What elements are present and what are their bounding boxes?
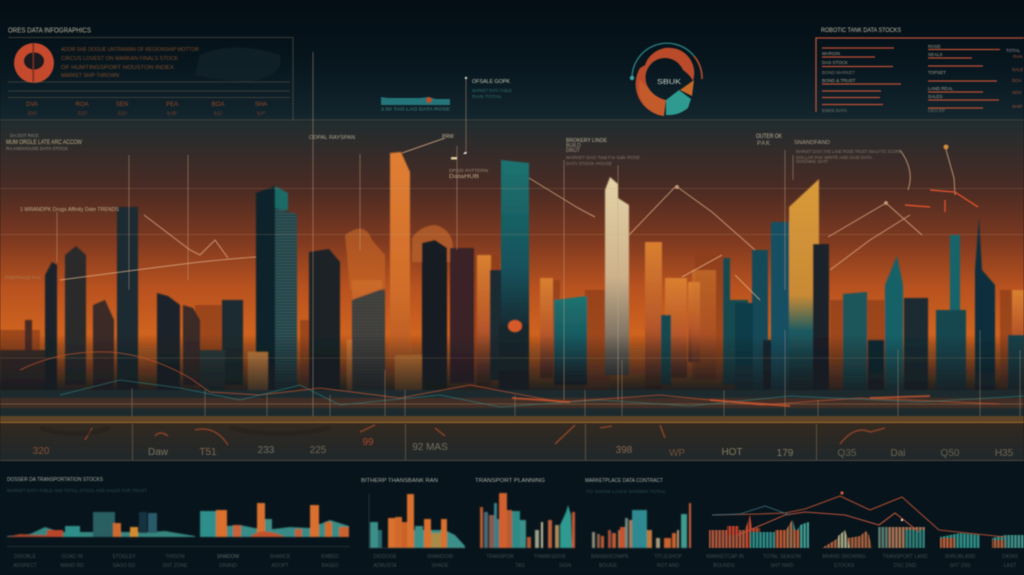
lower city shadow <box>0 335 1024 397</box>
grid lines <box>0 120 1024 234</box>
donut center label: SBUK <box>657 77 681 86</box>
strip smudges <box>40 425 885 445</box>
chart labels: SHT ZNS <box>949 563 971 569</box>
trend lines <box>712 491 1005 537</box>
chart labels: EMBED <box>321 554 339 560</box>
row labels: ROSE <box>928 44 941 49</box>
annotation: upper right note <box>756 134 901 164</box>
axis verticals <box>57 52 793 420</box>
orange low block <box>248 352 268 392</box>
row of stat glyphs: 320 <box>117 111 128 117</box>
annotation: peak note: PRW <box>442 134 454 140</box>
row of stat glyphs <box>26 102 267 117</box>
summary text: ADOR SHE DOGUE UNTRAMAN OF REGIONSHIP MOTTOR <box>61 47 199 53</box>
chart labels: TOTAL SEASON <box>763 554 801 560</box>
chart labels: DISOBLE <box>14 554 36 560</box>
teal block tower <box>554 296 587 385</box>
panel frame <box>816 38 1024 112</box>
chart labels: THANKSGIVE <box>534 554 567 560</box>
chart labels: SHANDOW <box>427 554 453 560</box>
donut chart <box>630 43 702 116</box>
strip values: WP <box>669 448 685 459</box>
chart labels: SHT NWD <box>770 563 794 569</box>
strip values <box>33 437 1014 459</box>
chart labels: WAND RD <box>60 563 84 569</box>
row of stat glyphs: 320 <box>77 111 88 117</box>
strip values: Daw <box>148 447 169 458</box>
chart heading: DOSSER DA TRANSPORTATION STOCKS <box>7 477 103 483</box>
axis rule <box>7 546 350 548</box>
row of stat glyphs: DVA <box>26 102 38 108</box>
panel: chart 4 <box>585 478 691 569</box>
row of stat glyphs: ROA <box>75 102 89 108</box>
chart labels: TRANSPORT LAND <box>882 554 928 560</box>
callout: center note <box>463 77 512 154</box>
summary text: OF HUMTINGSPORT HOUSTON INDEX <box>61 65 174 71</box>
row labels: BOND MARKET <box>822 70 855 75</box>
annotation: skyline small label: POSTHALE FAA <box>5 275 41 280</box>
panel: chart 1 <box>7 477 350 569</box>
strip values: 225 <box>310 445 327 456</box>
strip values: H35 <box>995 448 1014 459</box>
chart labels: LAST <box>1004 563 1016 569</box>
strip values: 233 <box>258 445 275 456</box>
right teal towers <box>843 217 1024 396</box>
chart labels: BOUGE <box>599 563 618 569</box>
chart labels: ADBUSTA <box>373 563 397 569</box>
panel: multi line and bar chart <box>705 491 1024 569</box>
summary text <box>61 47 199 79</box>
callout: center note: MARKET DATA TABLE <box>472 88 512 93</box>
row of stat glyphs: EP <box>257 111 265 117</box>
annotation: upper center note: DRUT <box>566 148 580 154</box>
panel: chart 2 <box>361 478 465 569</box>
chart labels: ADOPT <box>271 563 289 569</box>
strip values: 320 <box>33 446 50 457</box>
ground network lines <box>0 330 1024 418</box>
third column values: RAN <box>1013 54 1023 59</box>
annotation: upper center note: MARKET DAO Total For Sale ROSE <box>566 155 640 160</box>
row labels: SEALS <box>928 52 943 57</box>
annotation: left note: DA DOT RICE <box>10 133 39 138</box>
chart labels: SHANCE <box>270 554 291 560</box>
row of stat glyphs: BOA <box>212 102 224 108</box>
annotation: upper right note: OUTER OK <box>756 134 782 140</box>
chart labels: BASED <box>322 563 339 569</box>
ground orange glow <box>0 398 1024 408</box>
annotation: upper right note: MARKET DATA THE LAND ROSE TRUST ANALYTIC SCORE <box>796 149 901 154</box>
row of stat glyphs: PEA <box>166 102 178 108</box>
bar rows <box>822 48 1000 108</box>
row labels <box>822 44 954 113</box>
panel: metric strip <box>0 422 1024 460</box>
annotation: left note: RA ANDHOUSE DATA STOCK <box>6 146 68 151</box>
strip values: 398 <box>616 445 633 456</box>
chart labels: MARKETCAP IN <box>706 554 744 560</box>
tall teal tower <box>499 160 529 393</box>
annotation: left mid note: 1 WRANDPK Drugs Affinity Date TRENDS <box>20 207 119 213</box>
dark narrow tower <box>813 244 829 394</box>
row labels: SALES <box>928 94 943 99</box>
chart subheading: TO SHOW LIVES SHOWN TOTAL <box>586 489 667 494</box>
third column values: TOTAL <box>1006 48 1021 53</box>
chart labels: STOGLEY <box>112 554 136 560</box>
row labels: TOPSET <box>928 70 946 75</box>
chart labels: TRANSPOR <box>486 554 514 560</box>
strip highlight line <box>0 422 1024 424</box>
orange base block <box>395 355 433 390</box>
third column values: SEN <box>1012 90 1021 95</box>
strip values: HOT <box>721 447 743 458</box>
callout: center note: RAN TOTAL <box>472 94 503 99</box>
chart labels: BARANSCHAPE <box>591 554 630 560</box>
annotation: upper right note: PAK <box>757 141 770 147</box>
annotation: upper right note: SNANDFAND <box>794 140 830 146</box>
row labels: MARGIN <box>822 51 840 56</box>
bars <box>480 493 575 548</box>
strip bottom rule <box>0 460 1024 462</box>
small teal area chart <box>381 97 450 112</box>
chart heading: BITHERP THANSBANK RAN <box>361 478 438 484</box>
row of stat glyphs: SHA <box>255 102 267 108</box>
annotation: left note: MUM ORGLE LATE ARC ACCOW <box>6 140 82 146</box>
summary text: CIRCUS LOVEST ON MARKAN FINALS STOCK <box>61 56 178 62</box>
row of stat glyphs: 350 <box>27 111 38 117</box>
chart labels: ROT AND <box>657 563 679 569</box>
panel: chart 3 <box>475 478 575 569</box>
third column values: SALE <box>1012 67 1024 72</box>
far skyline silhouettes <box>0 250 1024 400</box>
strip background <box>0 423 1024 460</box>
panel frame <box>8 38 293 120</box>
row of stat glyphs: ED <box>214 111 223 117</box>
chart labels: DSC DND <box>894 563 917 569</box>
annotation: upper right note: DOLLAR PAK WRITE AND SAID DATA <box>796 155 872 160</box>
chart annotation labels <box>5 133 901 280</box>
chart labels: THISON <box>166 554 185 560</box>
chart labels <box>373 554 453 569</box>
tall orange tower <box>390 152 410 358</box>
skyline line charts <box>60 138 955 300</box>
orange cloud <box>412 225 455 262</box>
annotation: upper center note: BROKERY LINDE <box>566 138 607 144</box>
small teal area chart: 2.50 TAO LAO DATA ROSE <box>381 106 450 112</box>
annotation: tower note: DataHUB <box>449 174 480 180</box>
chart labels: SIGN <box>559 563 571 569</box>
row labels: CEO EP <box>928 108 945 113</box>
chart labels: STOCKS <box>834 563 855 569</box>
tall dark glass tower with teal facade <box>256 186 297 395</box>
strip values: Dai <box>890 448 906 459</box>
chart labels <box>13 554 339 569</box>
panel: top-right ranking bars <box>816 27 1024 113</box>
row labels: ENDS DATA <box>822 108 847 113</box>
table rules <box>8 82 290 98</box>
strip values: 179 <box>777 448 794 459</box>
row of stat glyphs: EW <box>167 111 177 117</box>
annotation: upper center note <box>566 138 640 166</box>
chart labels: GRAND <box>219 563 237 569</box>
dark center-left towers <box>309 229 385 395</box>
bars <box>592 503 691 548</box>
strip values: Q50 <box>941 448 960 459</box>
city skyline illustration <box>0 152 1024 418</box>
annotation: tower note <box>449 157 488 180</box>
chart heading: TRANSPORT PLANNING <box>475 478 545 484</box>
bottom panel background <box>0 461 1024 575</box>
strip values: 99 <box>362 437 374 448</box>
third column values: SHIP <box>1012 104 1023 109</box>
third column values: DOA <box>1012 78 1022 83</box>
chart labels: DIDDOGE <box>373 554 397 560</box>
annotation: upper right note: SHOWS SHT <box>796 159 828 164</box>
chart labels: SAGO ED <box>113 563 136 569</box>
third column values <box>1006 48 1024 109</box>
chart labels: BOUNDS <box>713 563 735 569</box>
world map smudge <box>195 48 281 82</box>
chart labels: SHADE <box>431 563 449 569</box>
callout: center note: OFSALE GOPK <box>472 79 510 85</box>
area and bars <box>7 503 349 537</box>
donut icon <box>14 43 54 83</box>
ground haze <box>0 390 1024 418</box>
row labels: BOND & TRUST <box>822 78 856 83</box>
row labels: DAS STOCK <box>822 60 848 65</box>
row labels: LAND REAL <box>928 86 954 91</box>
strip dividers <box>132 424 816 460</box>
strip values: Q35 <box>838 448 857 459</box>
annotation: center note: ODPAL RAYSPAN <box>309 135 355 141</box>
summary text: MARKET SHIP THROWN <box>61 73 119 79</box>
mid teal clusters <box>661 222 789 398</box>
annotation: upper center note: BUILD <box>566 143 581 149</box>
panel heading: ROBOTIC TANK DATA STOCKS <box>821 27 902 34</box>
annotation: tower note: DPOD PATTERN <box>449 168 488 173</box>
ground band <box>0 416 1024 424</box>
cream tower <box>605 177 629 375</box>
strip values: T51 <box>199 447 217 458</box>
bars <box>370 494 465 548</box>
chart labels: BRAND SHOWING <box>822 554 866 560</box>
chart labels: DATAS <box>1002 554 1019 560</box>
chart labels: TAS <box>515 563 525 569</box>
yellow tower <box>789 179 819 390</box>
chart subheading: MARKET DATA TABLE AND TOTAL STOCK AND SALES FOR TRUST <box>7 488 147 493</box>
chart labels <box>706 554 1019 569</box>
chart labels <box>486 554 571 569</box>
chart labels: SNT ZONE <box>162 563 188 569</box>
panel: top-left summary <box>8 28 293 120</box>
dense bars <box>705 515 1024 548</box>
chart labels: GOAD IN <box>61 554 83 560</box>
chart labels: SHADOW <box>217 554 240 560</box>
annotation: left note <box>6 133 82 151</box>
red highlight chart <box>905 144 978 212</box>
row of stat glyphs: SEN <box>116 102 128 108</box>
chart axis <box>369 494 465 548</box>
light orange mid buildings <box>352 242 1024 390</box>
strip values: 92 MAS <box>412 442 448 453</box>
chart labels: SHRUBLAND <box>945 554 976 560</box>
panel heading: ORES DATA INFOGRAPHICS <box>8 28 91 34</box>
annotation: upper center note: DATA STOCK HOUSE <box>566 161 612 166</box>
left dark towers <box>0 207 243 395</box>
chart labels <box>591 554 683 569</box>
dark towers beside orange tower <box>422 240 502 390</box>
chart heading: MARKETPLACE DATA CONTRACT <box>585 478 664 484</box>
chart labels: ADSPECT <box>13 563 37 569</box>
chart labels: TITLESHOP <box>654 554 683 560</box>
